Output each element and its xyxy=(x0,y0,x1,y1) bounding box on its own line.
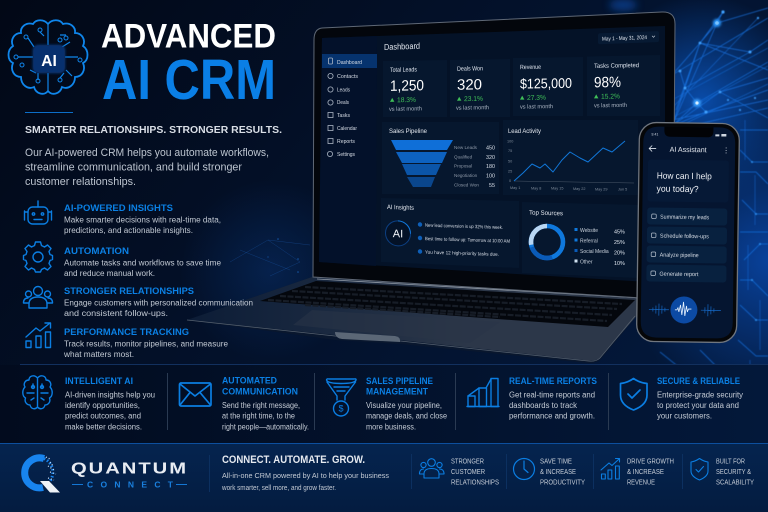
phone xyxy=(636,122,740,343)
card: intelligent AI: predict outcomes, and xyxy=(65,412,141,420)
benefit: productivity xyxy=(514,458,585,486)
card: automated communication: AUTOMATED xyxy=(222,376,277,386)
KPI: tasks completed: vs last month xyxy=(594,103,627,109)
card: sales pipeline management: SALES PIPELINE xyxy=(366,376,434,387)
sales pipeline panel: 100 xyxy=(486,174,495,180)
lead activity chart panel: 25 xyxy=(508,170,512,174)
brain AI logo: AI xyxy=(41,53,57,70)
sales pipeline panel: 450 xyxy=(486,146,495,152)
top sources panel: Social Media xyxy=(580,249,609,255)
icon: robot xyxy=(24,201,52,224)
feature: performance tracking xyxy=(26,323,229,359)
benefit: customer relationships: RELATIONSHIPS xyxy=(451,480,499,486)
phone suggestion buttons xyxy=(646,207,727,283)
AI insights panel: New lead conversion is up 32% this week. xyxy=(425,223,503,231)
phone: 9:41 xyxy=(651,132,658,137)
AI insights panel: You have 12 high-priority tasks due. xyxy=(425,250,499,258)
benefit: growth: & INCREASE xyxy=(627,469,664,476)
phone header xyxy=(649,144,726,155)
top sources panel: 45% xyxy=(614,230,625,236)
lead activity chart panel: Jun 5 xyxy=(618,188,627,192)
card: sales pipeline management: $ xyxy=(338,404,344,414)
sales pipeline panel: Sales Pipeline xyxy=(389,128,427,135)
feature: automation: and reduce manual work. xyxy=(64,269,155,278)
feature: AI-powered insights: Make smarter decisions with real-time data, xyxy=(64,216,221,224)
voice button xyxy=(649,296,721,324)
feature: automation: AUTOMATION xyxy=(64,246,129,257)
KPI: tasks completed: Tasks Completed xyxy=(594,62,640,70)
sales pipeline panel: Qualified xyxy=(454,154,473,160)
icon: clock xyxy=(514,458,534,480)
intro paragraph: customer relationships. xyxy=(25,176,136,188)
title: ADVANCED xyxy=(101,18,276,56)
phone prompt panel xyxy=(647,159,729,203)
sales pipeline panel: Closed Won xyxy=(454,182,479,188)
lead activity chart panel: May 15 xyxy=(551,187,563,191)
feature: performance tracking: what matters most. xyxy=(63,350,134,359)
logo: Quantum Connect xyxy=(25,457,188,492)
KPI: deals won: vs last month xyxy=(456,105,489,112)
benefit: security: SECURITY & xyxy=(716,469,751,476)
card: sales pipeline management: Visualize your pipeline, xyxy=(366,401,442,410)
phone suggestion buttons: Schedule follow-ups xyxy=(660,234,709,240)
lead activity chart panel: May 1 xyxy=(510,186,520,190)
KPI: revenue: Revenue xyxy=(520,64,541,71)
AI insights panel xyxy=(381,198,519,268)
lead activity chart panel: 0 xyxy=(509,179,511,183)
sidebar: Calendar xyxy=(337,126,357,132)
card: automated communication: at the right time, to the xyxy=(222,412,295,420)
logo: Quantum Connect: CONNECT xyxy=(87,480,174,490)
phone suggestion buttons: Analyze pipeline xyxy=(660,253,699,259)
card: real-time reports xyxy=(467,376,598,420)
benefit: security: BUILT FOR xyxy=(716,458,745,466)
lead activity chart panel: May 22 xyxy=(573,187,585,191)
card: automated communication: right people—automatically. xyxy=(222,422,309,432)
lead activity chart panel: May 29 xyxy=(595,187,607,191)
lead activity chart panel: 100 xyxy=(507,140,513,144)
card: intelligent AI: INTELLIGENT AI xyxy=(65,376,133,387)
title xyxy=(101,18,276,112)
icon: gear xyxy=(24,242,52,272)
sales pipeline panel: 180 xyxy=(486,164,495,170)
benefit: customer relationships xyxy=(420,458,499,486)
sales pipeline panel: Proposal xyxy=(454,164,472,168)
KPI: total leads: 18.3% xyxy=(397,97,416,104)
icon: envelope xyxy=(180,383,211,406)
feature: stronger relationships xyxy=(24,286,253,318)
KPI: total leads: vs last month xyxy=(389,106,422,113)
footer message: work smarter, sell more, and grow faster. xyxy=(221,483,336,492)
card: automated communication: COMMUNICATION xyxy=(222,386,298,398)
sidebar xyxy=(319,36,377,266)
card: sales pipeline management: manage deals, and close xyxy=(366,412,447,420)
sidebar: Settings xyxy=(337,152,355,158)
card: secure and reliable: SECURE & RELIABLE xyxy=(657,376,740,387)
AI insights panel: AI Insights xyxy=(387,204,414,212)
KPI: deals won: Deals Won xyxy=(457,65,483,73)
icon: people xyxy=(420,459,444,478)
feature: stronger relationships: and consistent follow-ups. xyxy=(64,309,168,318)
card: intelligent AI: AI-driven insights help you xyxy=(65,390,155,400)
benefit: growth xyxy=(601,458,674,486)
top sources panel: Top Sources xyxy=(529,210,563,217)
sidebar: Dashboard xyxy=(337,60,362,66)
card: sales pipeline management: more business. xyxy=(366,422,416,432)
card: automated communication: Send the right message, xyxy=(222,401,300,410)
brain AI logo xyxy=(8,20,88,94)
lead activity chart panel xyxy=(503,120,638,195)
benefit: customer relationships: STRONGER xyxy=(451,458,484,466)
sidebar: Reports xyxy=(337,139,355,145)
icon: growth chart xyxy=(601,458,620,479)
card: real-time reports: REAL-TIME REPORTS xyxy=(509,376,598,387)
AI insights panel: AI xyxy=(393,228,403,240)
benefit: security: SCALABILITY xyxy=(716,480,754,486)
footer message xyxy=(221,454,389,492)
KPI: tasks completed: 15.2% xyxy=(601,93,620,101)
card: secure and reliable: Enterprise-grade security xyxy=(657,390,743,400)
KPI: total leads: 1,250 xyxy=(390,77,424,95)
dashboard screen xyxy=(319,26,665,283)
card: automated communication xyxy=(180,376,309,432)
top sources panel xyxy=(522,202,640,278)
icon: people xyxy=(24,286,52,308)
dashboard header: Dashboard xyxy=(384,41,420,52)
benefit: productivity: PRODUCTIVITY xyxy=(540,480,585,486)
lead activity chart panel: 75 xyxy=(508,149,512,153)
feature: automation: Automate tasks and workflows to save time xyxy=(64,258,222,268)
sidebar: Leads xyxy=(337,88,350,94)
card: real-time reports: Get real-time reports and xyxy=(509,390,595,400)
feature: performance tracking: PERFORMANCE TRACKING xyxy=(64,327,189,338)
card: real-time reports: performance and growth. xyxy=(509,412,595,420)
dashboard header xyxy=(384,31,659,52)
icon: brain xyxy=(23,376,52,409)
AI insights panel: Best time to follow up: Tomorrow at 10:00 AM xyxy=(425,236,510,245)
KPI: deals won: 320 xyxy=(457,76,482,94)
card: intelligent AI xyxy=(23,376,155,432)
KPI: total leads: Total Leads xyxy=(390,66,417,74)
sidebar: Contacts xyxy=(337,74,358,80)
sidebar: Deals xyxy=(337,100,349,106)
lead activity chart panel: 50 xyxy=(508,160,512,164)
benefit: customer relationships: CUSTOMER xyxy=(451,469,485,476)
benefit: productivity: & INCREASE xyxy=(540,469,576,476)
footer band xyxy=(0,443,768,512)
phone prompt panel: you today? xyxy=(657,184,699,194)
sales pipeline panel: New Leads xyxy=(454,145,478,150)
feature: stronger relationships: STRONGER RELATIONSHIPS xyxy=(64,286,195,297)
phone header: AI Assistant xyxy=(670,145,707,154)
benefit: productivity: SAVE TIME xyxy=(540,458,572,466)
phone notch xyxy=(664,127,713,137)
laptop deck xyxy=(187,277,645,363)
top sources panel: 25% xyxy=(614,240,625,246)
intro paragraph: streamline communication, and build stronger xyxy=(25,162,242,174)
card: secure and reliable: your customers. xyxy=(657,412,712,420)
phone suggestion buttons: Generate report xyxy=(659,272,699,278)
icon: funnel with dollar xyxy=(326,379,356,416)
KPI: deals won: 23.1% xyxy=(464,96,483,103)
donut chart xyxy=(531,226,563,258)
sidebar: Tasks xyxy=(337,113,350,119)
intro paragraph: Our AI-powered CRM helps you automate workflows, xyxy=(25,147,269,159)
footer message: CONNECT. AUTOMATE. GROW. xyxy=(222,454,365,466)
feature: automation xyxy=(24,242,222,278)
dashboard header: May 1 - May 31, 2024 xyxy=(602,35,647,43)
top sources panel: 10% xyxy=(614,261,625,267)
icon: bar chart xyxy=(467,378,499,406)
intro paragraph xyxy=(25,147,269,188)
keyboard xyxy=(260,279,640,327)
KPI: tasks completed: 98% xyxy=(594,74,621,91)
sales pipeline panel: Negotiation xyxy=(454,173,478,178)
icon: shield xyxy=(620,378,647,410)
feature: AI-powered insights xyxy=(24,201,221,235)
phone prompt panel: How can I help xyxy=(657,171,712,181)
KPI: tasks completed xyxy=(594,62,640,109)
top sources panel: 20% xyxy=(614,250,625,256)
top sources panel: Website xyxy=(580,228,598,234)
footer message: All-in-one CRM powered by AI to help your business xyxy=(222,471,389,480)
card: sales pipeline management xyxy=(326,376,447,432)
card: intelligent AI: identify opportunities, xyxy=(65,401,140,410)
benefit: growth: DRIVE GROWTH xyxy=(627,458,674,466)
phone suggestion buttons: Summarize my leads xyxy=(660,215,709,221)
card: intelligent AI: make better decisions. xyxy=(65,422,142,432)
lower feature strip xyxy=(0,364,768,443)
KPI: deals won xyxy=(456,65,489,112)
top sources panel: Other xyxy=(580,260,593,266)
top sources panel: Referral xyxy=(580,238,598,244)
laptop screen bezel xyxy=(313,12,675,300)
KPI: revenue: vs last month xyxy=(520,104,553,111)
card: secure and reliable xyxy=(620,376,743,420)
feature: performance tracking: Track results, monitor pipelines, and measure xyxy=(64,340,229,348)
card: sales pipeline management: MANAGEMENT xyxy=(366,386,428,398)
card: secure and reliable: to protect your data and xyxy=(657,401,739,410)
laptop xyxy=(187,12,675,363)
KPI cards xyxy=(383,55,660,117)
feature: AI-powered insights: AI-POWERED INSIGHTS xyxy=(64,203,174,214)
logo: Quantum Connect: QUANTUM xyxy=(71,460,188,478)
sales pipeline panel: 320 xyxy=(486,155,495,161)
logo mark xyxy=(25,457,60,492)
card: real-time reports: dashboards to track xyxy=(509,401,577,410)
sales pipeline panel xyxy=(382,122,499,194)
title: AI CRM xyxy=(102,48,276,112)
sales pipeline panel: 55 xyxy=(489,183,495,189)
icon: growth chart xyxy=(26,323,50,348)
benefit: security xyxy=(691,458,754,486)
KPI: total leads xyxy=(389,66,424,113)
KPI: revenue xyxy=(520,63,572,111)
benefit: growth: REVENUE xyxy=(627,480,655,486)
tagline: SMARTER RELATIONSHIPS. STRONGER RESULTS. xyxy=(25,124,282,136)
feature: AI-powered insights: predictions, and actionable insights. xyxy=(64,226,193,235)
feature: stronger relationships: Engage customers with personalized communication xyxy=(64,298,253,308)
KPI: revenue: $125,000 xyxy=(520,75,572,92)
lead activity chart panel: May 8 xyxy=(531,186,541,190)
funnel chart xyxy=(391,140,453,187)
KPI: revenue: 27.3% xyxy=(527,95,546,102)
lead activity chart panel: Lead Activity xyxy=(508,128,542,135)
icon: shield xyxy=(691,458,708,480)
